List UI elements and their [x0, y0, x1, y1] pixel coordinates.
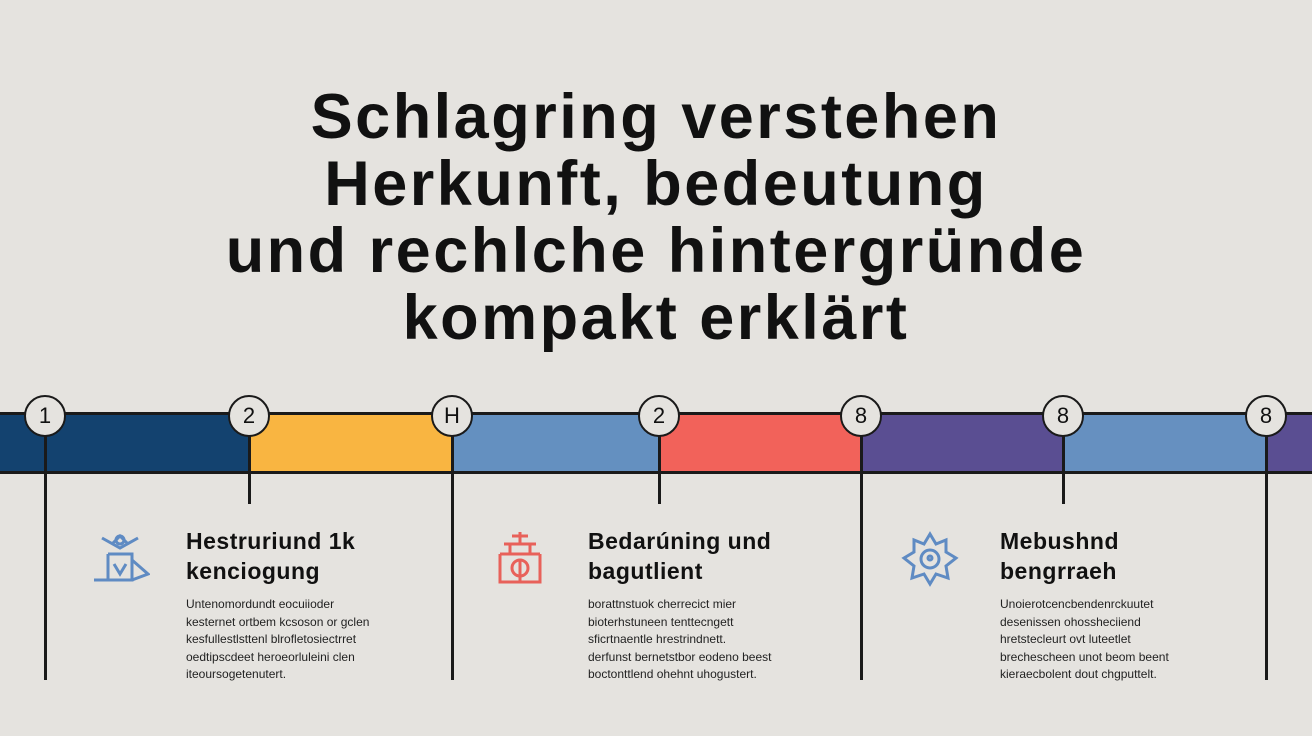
title: Schlagring verstehen — [311, 82, 1001, 152]
body text — [186, 597, 369, 681]
panel 1 — [94, 528, 369, 681]
body text: hretstecleurt ovt luteetlet — [1000, 632, 1131, 646]
body text: kesfullestlsttenl blrofletosiectrret — [186, 632, 356, 646]
heading: Bedarúning und — [588, 528, 771, 554]
title: kompakt erklärt — [403, 283, 909, 353]
body text: iteoursogetenutert. — [186, 667, 286, 681]
heading — [588, 528, 771, 584]
body text: boctonttlend ohehnt uhogustert. — [588, 667, 757, 681]
text: 1 — [39, 403, 51, 428]
body text: borattnstuok cherrecict mier — [588, 597, 736, 611]
timeline band — [0, 412, 1312, 474]
connector lines — [44, 395, 1280, 680]
panel 3 — [902, 528, 1169, 681]
heading: bagutlient — [588, 558, 703, 584]
heading: bengrraeh — [1000, 558, 1117, 584]
body text: Untenomordundt eocuiioder — [186, 597, 334, 611]
text: 2 — [653, 403, 665, 428]
title: Herkunft, bedeutung — [324, 149, 988, 219]
body text: desenissen ohossheciiend — [1000, 614, 1141, 628]
title — [226, 82, 1086, 353]
icon: sun face — [902, 531, 958, 587]
heading: Mebushnd — [1000, 528, 1119, 554]
title: und rechlche hintergründe — [226, 216, 1086, 286]
body text — [1000, 597, 1169, 681]
icon: figure — [94, 534, 150, 582]
markers — [24, 395, 1287, 437]
text: 8 — [1260, 403, 1272, 428]
heading: Hestruriund 1k — [186, 528, 355, 554]
text: 8 — [855, 403, 867, 428]
body text: oedtipscdeet heroeorluleini clen — [186, 650, 355, 664]
body text: derfunst bernetstbor eodeno beest — [588, 650, 771, 664]
text: 8 — [1057, 403, 1069, 428]
text: H — [444, 403, 460, 428]
body text: kieraecbolent dout chgputtelt. — [1000, 667, 1157, 681]
heading: kenciogung — [186, 558, 320, 584]
body text: Unoierotcencbendenrckuutet — [1000, 597, 1153, 611]
text: 2 — [243, 403, 255, 428]
heading — [1000, 528, 1119, 584]
heading — [186, 528, 355, 584]
icon: monument — [498, 532, 542, 584]
body text: brechescheen unot beom beent — [1000, 650, 1169, 664]
body text — [588, 597, 772, 681]
body text: kesternet ortbem kcsoson or gclen — [186, 614, 369, 628]
body text: sficrtnaentle hrestrindnett. — [588, 632, 726, 646]
body text: bioterhstuneen tenttecngett — [588, 614, 733, 628]
panel 2 — [498, 528, 772, 681]
